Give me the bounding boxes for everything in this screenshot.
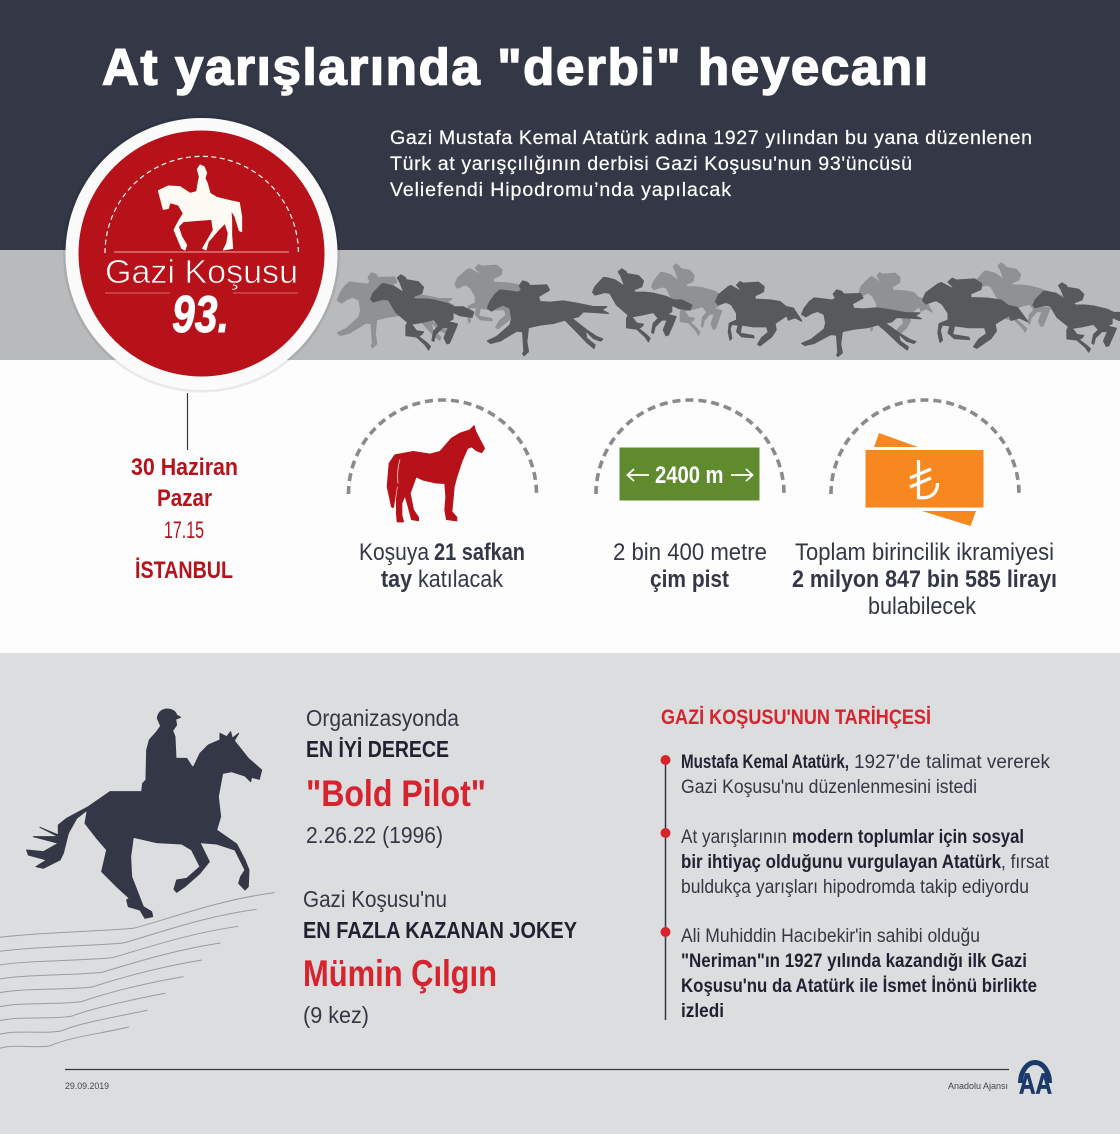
footer date: 29.09.2019 <box>65 1081 109 1092</box>
stat: distance: çim pist <box>650 566 729 593</box>
stat: horses: katılacak <box>418 566 504 593</box>
history heading: GAZİ KOŞUSU'NUN TARİHÇESİ <box>661 706 931 729</box>
icon: jockey on horse silhouette <box>27 709 262 918</box>
lower section background <box>0 653 1120 1134</box>
header background <box>0 0 1120 250</box>
history item 2 <box>681 827 1050 898</box>
footer rule <box>65 1068 1009 1070</box>
history item 1: 1927'de talimat vererek <box>854 752 1050 773</box>
history item 3: izledi <box>681 1001 724 1022</box>
race band background <box>0 250 1120 360</box>
icon: red horse <box>387 426 484 522</box>
title: At yarışlarında "derbi" heyecanı <box>102 38 928 96</box>
history item 3: "Neriman"ın 1927 yılında kazandığı ilk Gazi <box>681 951 1027 972</box>
top jockey block: Mümin Çılgın <box>303 953 497 994</box>
best record block: "Bold Pilot" <box>306 773 486 814</box>
stat: prize money: bulabilecek <box>868 593 977 620</box>
history item 1: Gazi Koşusu'nu düzenlenmesini istedi <box>681 777 977 798</box>
logo: Anadolu Ajansı: AA <box>1019 1068 1052 1100</box>
history item 1: Mustafa Kemal Atatürk, <box>681 752 849 773</box>
history item 1 <box>681 752 1050 798</box>
intro text: Gazi Mustafa Kemal Atatürk adına 1927 yılından bu yana düzenlenen <box>390 127 1032 149</box>
galloping horses illustration <box>337 263 1120 356</box>
stat: distance: 2 bin 400 metre <box>613 539 767 566</box>
history item 3: Koşusu'nu da Atatürk ile İsmet İnönü birlikte <box>681 976 1037 997</box>
history item 2: modern toplumlar için sosyal <box>792 827 1024 848</box>
best record block: 2.26.22 (1996) <box>306 822 443 848</box>
best record block: Organizasyonda <box>306 705 459 731</box>
intro text <box>390 127 1032 201</box>
stat: prize money: Toplam birincilik ikramiyesi <box>795 539 1054 566</box>
stat: prize money <box>792 400 1057 620</box>
top jockey block: Gazi Koşusu'nu <box>303 886 447 912</box>
stat: horses <box>348 400 536 593</box>
icon: green distance sign: 2400 m <box>655 462 724 489</box>
badge: Gazi Koşusu 93: Gazi Koşusu <box>105 253 298 290</box>
date and place block <box>131 393 238 584</box>
date and place block: 30 Haziran <box>131 454 238 481</box>
date and place block: 17.15 <box>164 517 204 544</box>
stat: horses: tay <box>381 566 413 593</box>
history timeline <box>660 755 670 1020</box>
intro text: Veliefendi Hipodromu’nda yapılacak <box>390 179 731 201</box>
best record block: EN İYİ DERECE <box>306 736 449 762</box>
history item 3: Ali Muhiddin Hacıbekir'in sahibi olduğu <box>681 926 980 947</box>
date and place block: Pazar <box>157 485 212 512</box>
icon: orange lira banknote <box>866 433 984 526</box>
stat: distance <box>596 400 784 593</box>
icon: green distance sign <box>620 448 760 500</box>
history item 2: buldukça yarışları hipodromda takip ediyordu <box>681 877 1029 898</box>
top jockey block: (9 kez) <box>303 1002 369 1028</box>
history item 3 <box>681 926 1037 1022</box>
stat: prize money: 2 milyon 847 bin 585 lirayı <box>792 566 1057 593</box>
badge: Gazi Koşusu 93 <box>63 116 340 392</box>
wavy track lines <box>0 893 275 1048</box>
history item 2: , fırsat <box>1001 852 1050 873</box>
intro text: Türk at yarışçılığının derbisi Gazi Koşusu'nun 93'üncüsü <box>390 153 912 175</box>
top jockey block <box>303 886 577 1028</box>
stat: horses: Koşuya <box>359 539 430 566</box>
date and place block: İSTANBUL <box>135 557 233 584</box>
footer credit: Anadolu Ajansı <box>948 1081 1008 1092</box>
best record block <box>306 705 486 848</box>
stat: horses: 21 safkan <box>434 539 525 566</box>
badge: Gazi Koşusu 93: 93. <box>172 286 229 344</box>
top jockey block: EN FAZLA KAZANAN JOKEY <box>303 917 577 943</box>
info section background <box>0 360 1120 653</box>
logo: Anadolu Ajansı <box>1019 1062 1052 1100</box>
history item 2: At yarışlarının <box>681 827 787 848</box>
history item 2: bir ihtiyaç olduğunu vurgulayan Atatürk <box>681 852 1001 873</box>
